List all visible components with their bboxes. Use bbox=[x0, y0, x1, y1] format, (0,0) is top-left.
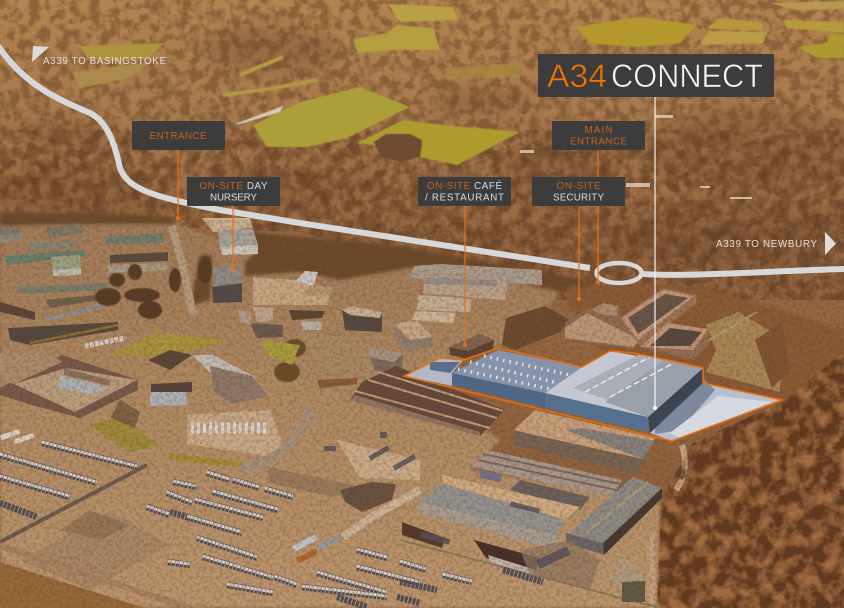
low sheds south bbox=[402, 522, 646, 602]
large warehouse far left bbox=[0, 353, 138, 418]
estate buildings north west bbox=[0, 218, 300, 365]
label: main entrance bbox=[552, 121, 645, 150]
label: entrance bbox=[132, 121, 225, 150]
logo: A34 Connect: CONNECT bbox=[611, 58, 763, 94]
industrial estate ground bbox=[0, 220, 660, 608]
road: roundabout bbox=[596, 263, 642, 283]
road: A339 bbox=[0, 46, 590, 268]
car parking rows bbox=[0, 442, 543, 607]
site boundary bbox=[404, 348, 782, 441]
warehouse south four bbox=[566, 477, 662, 555]
marker: site pointer bbox=[653, 97, 657, 410]
west unit bbox=[452, 350, 582, 408]
subject site bbox=[404, 348, 782, 441]
long sheds centre bbox=[350, 366, 505, 436]
estate yards and grass west bbox=[88, 333, 285, 468]
foreground tree belt bbox=[0, 212, 585, 306]
forest and paddock bbox=[502, 284, 844, 608]
label: on-site day nursery: NURSERY bbox=[210, 192, 257, 204]
distant settlement flecks bbox=[520, 115, 752, 199]
arrow: to Basingstoke bbox=[32, 46, 49, 62]
farmland fields bbox=[72, 1, 844, 165]
water works buildings bbox=[565, 288, 708, 360]
label: main entrance: ENTRANCE bbox=[570, 136, 627, 148]
label: on-site day nursery: ON-SITE DAY bbox=[200, 181, 268, 192]
label: on-site security: ON-SITE bbox=[556, 181, 601, 192]
arrow: to Newbury bbox=[825, 232, 836, 255]
estate texture overlay bbox=[0, 220, 844, 608]
label: main entrance: MAIN bbox=[584, 125, 612, 136]
warehouse south two bbox=[472, 450, 622, 510]
east unit bbox=[545, 351, 703, 433]
label: entrance: ENTRANCE bbox=[150, 131, 207, 142]
marker: security bbox=[577, 206, 581, 301]
estate trees bbox=[95, 256, 212, 319]
logo: A34 Connect bbox=[538, 54, 774, 97]
marker: nursery bbox=[231, 206, 235, 273]
marker: café bbox=[463, 206, 467, 347]
field tree clump bbox=[374, 134, 422, 162]
woodland clumps bbox=[657, 352, 844, 608]
upper woodland texture bbox=[0, 0, 844, 300]
open ground south bbox=[0, 405, 685, 608]
label: on-site café / restaurant: / RESTAURANT bbox=[425, 192, 504, 204]
road: A339 east bbox=[642, 269, 844, 275]
label: on-site security bbox=[532, 177, 625, 206]
label: on-site café / restaurant bbox=[418, 177, 511, 206]
yards bbox=[404, 358, 782, 441]
hazy tree belts bbox=[0, 25, 844, 265]
warehouse south three bbox=[419, 475, 580, 550]
label: on-site security: SECURITY bbox=[553, 192, 604, 204]
road label: Basingstoke: A339 TO BASINGSTOKE bbox=[43, 56, 166, 67]
estate buildings north bbox=[253, 264, 542, 390]
marker: main entrance bbox=[596, 150, 600, 284]
marker: entrance bbox=[176, 150, 180, 220]
lorries and scattered vehicles bbox=[0, 429, 571, 569]
logo: A34 Connect: A34 bbox=[547, 58, 607, 94]
warehouse south one bbox=[514, 410, 655, 474]
label: on-site day nursery bbox=[187, 177, 280, 206]
label: on-site café / restaurant: ON-SITE CAFÉ bbox=[427, 181, 502, 192]
road label: Newbury: A339 TO NEWBURY bbox=[716, 239, 817, 250]
